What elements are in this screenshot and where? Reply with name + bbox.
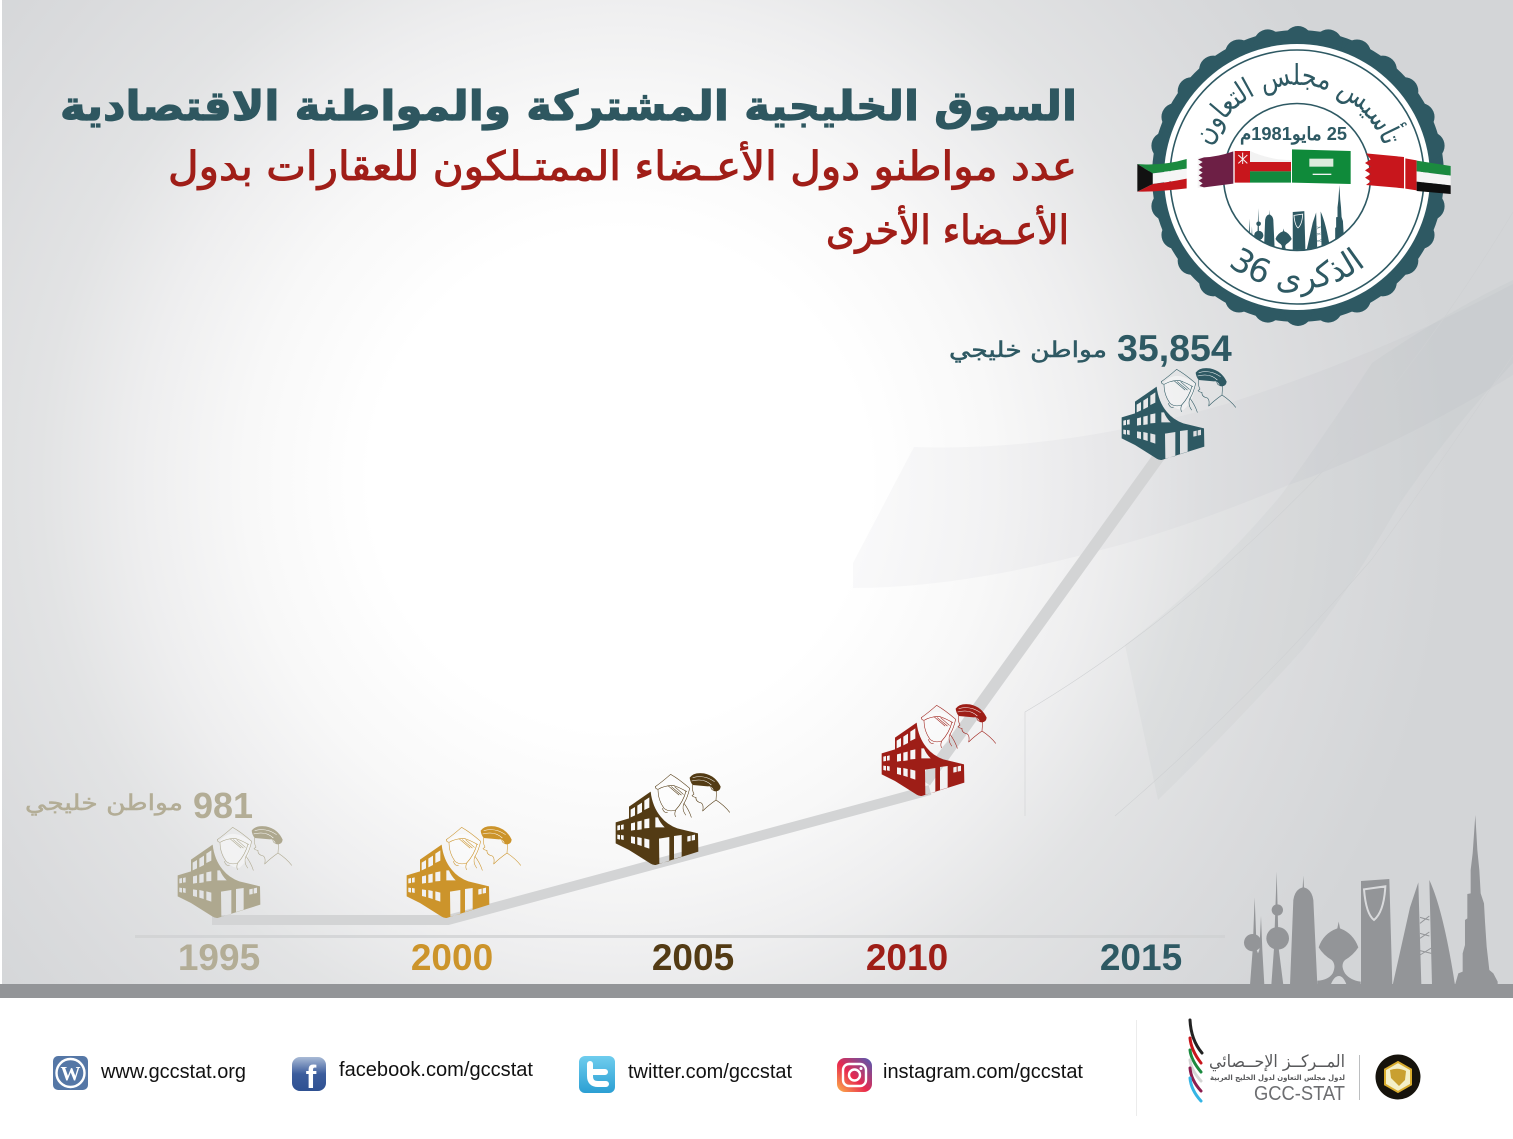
flag: Kuwait bbox=[1137, 159, 1187, 192]
icon: building and citizens 2000 bbox=[407, 826, 521, 918]
icon: building and citizens 2015 bbox=[1122, 368, 1236, 460]
icon: instagram bbox=[837, 1058, 872, 1092]
icon: building and citizens 2005 bbox=[616, 773, 730, 865]
bottom band bbox=[0, 984, 1513, 998]
badge skyline bbox=[1248, 185, 1344, 250]
icon: twitter bbox=[579, 1056, 615, 1093]
flags ribbon bbox=[1137, 149, 1451, 194]
flag: Oman bbox=[1235, 151, 1291, 183]
link: website: www.gccstat.org bbox=[100, 1061, 246, 1083]
icon: wordpress: W bbox=[60, 1063, 80, 1085]
year labels bbox=[178, 937, 1182, 978]
icon: building and citizens 1995 bbox=[178, 826, 292, 918]
value 981: 981 bbox=[193, 785, 253, 826]
year labels: 1995 bbox=[178, 937, 260, 978]
year labels: 2005 bbox=[652, 937, 734, 978]
growth line bbox=[212, 455, 1160, 920]
badge date: 25 مايو1981م bbox=[1240, 124, 1347, 145]
flag: Saudi Arabia bbox=[1292, 149, 1351, 184]
footer links bbox=[53, 1056, 1083, 1095]
value 35,854 bbox=[949, 327, 1232, 369]
anniversary badge bbox=[1137, 26, 1451, 326]
flag: Qatar bbox=[1198, 151, 1233, 188]
subtitle: الأعـضاء الأخرى bbox=[826, 205, 1069, 254]
badge bottom text: الذكرى 36 bbox=[1230, 246, 1364, 298]
flag: Bahrain bbox=[1365, 153, 1417, 190]
logo Arabic name: المــركــز الإحــصائي bbox=[1209, 1052, 1345, 1072]
value 981: مواطن خليجي bbox=[25, 791, 183, 816]
subtitle: عدد مواطنو دول الأعـضاء الممتـلكون للعقارات بدول bbox=[168, 141, 1077, 190]
icon: wordpress bbox=[53, 1056, 88, 1090]
flag: UAE bbox=[1417, 161, 1451, 194]
GCC emblem bbox=[1376, 1054, 1420, 1100]
skyline bbox=[1244, 815, 1498, 985]
logo Arabic subtitle: لدول مجلس التعاون لدول الخليج العربية bbox=[1210, 1073, 1345, 1082]
year labels: 2010 bbox=[866, 937, 948, 978]
title: السوق الخليجية المشتركة والمواطنة الاقتصادية bbox=[60, 82, 1077, 131]
GCC-STAT logo bbox=[1136, 1020, 1420, 1116]
subtitle bbox=[168, 141, 1077, 254]
year labels: 2015 bbox=[1100, 937, 1182, 978]
link: twitter: twitter.com/gccstat bbox=[628, 1061, 792, 1083]
link: facebook: facebook.com/gccstat bbox=[339, 1059, 533, 1081]
value 35,854: 35,854 bbox=[1117, 327, 1232, 369]
icon: facebook: f bbox=[306, 1059, 317, 1095]
year labels: 2000 bbox=[411, 937, 493, 978]
badge top text: تأسيس مجلس التعاون bbox=[1200, 63, 1407, 144]
chart baseline bbox=[135, 935, 1225, 938]
value 35,854: مواطن خليجي bbox=[949, 338, 1107, 363]
link: instagram: instagram.com/gccstat bbox=[883, 1061, 1083, 1083]
logo ribbon bbox=[1190, 1020, 1202, 1101]
icon: building and citizens 2010 bbox=[882, 704, 996, 796]
icon: facebook bbox=[292, 1057, 326, 1095]
logo English name: GCC-STAT bbox=[1254, 1083, 1345, 1105]
value 981 bbox=[25, 785, 253, 826]
